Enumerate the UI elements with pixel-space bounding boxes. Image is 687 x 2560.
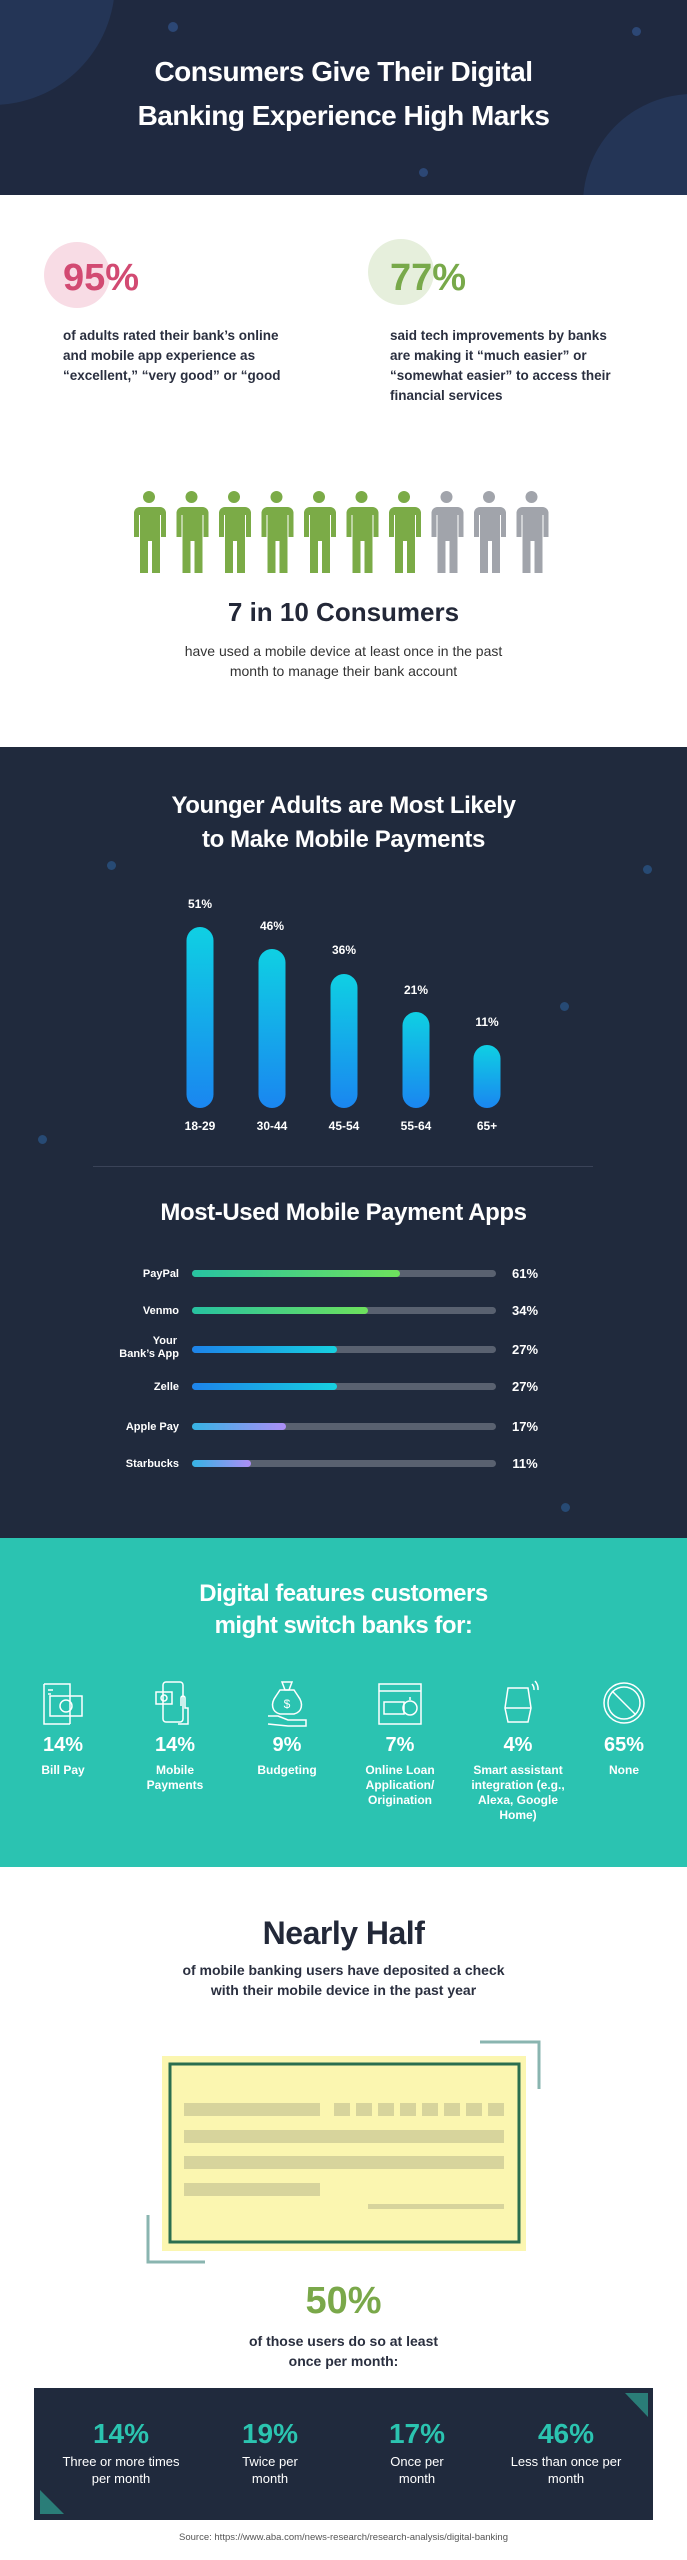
panel: mobile payments bbox=[0, 747, 687, 1538]
icon: none bbox=[604, 1683, 644, 1723]
text: 7 in 10 description bbox=[185, 643, 502, 679]
text: 7 in 10 description: have used a mobile device at least once in the past bbox=[185, 643, 502, 659]
stat: 77%: financial services bbox=[390, 388, 503, 403]
icon: smart assistant bbox=[505, 1681, 538, 1722]
heading: digital features: might switch banks for: bbox=[215, 1612, 472, 1639]
panel: digital features: Mobile Payments bbox=[147, 1763, 203, 1792]
stat: 95%: and mobile app experience as bbox=[63, 348, 255, 363]
text: 50% description bbox=[249, 2333, 438, 2369]
stat: 17%: month bbox=[399, 2471, 435, 2486]
stat: 77%: are making it “much easier” or bbox=[390, 348, 587, 363]
panel: digital features: 9% bbox=[273, 1734, 301, 1756]
panel: digital features: None bbox=[609, 1763, 639, 1777]
bar chart: payment apps: 17% bbox=[512, 1419, 538, 1434]
stat: 77%: 77% bbox=[390, 257, 466, 299]
text: nearly half description bbox=[182, 1962, 505, 1998]
bar chart: age groups: 21% bbox=[404, 983, 428, 997]
stat: 17%: 17% bbox=[389, 2418, 445, 2449]
bar chart: age groups: 51% bbox=[188, 897, 212, 911]
panel: digital features: 7% bbox=[386, 1734, 414, 1756]
stat: 77%: said tech improvements by banks bbox=[390, 328, 607, 343]
bar chart: payment apps: 11% bbox=[512, 1456, 538, 1471]
bar chart: payment apps: 27% bbox=[512, 1379, 538, 1394]
heading: digital features: Digital features customers bbox=[199, 1580, 488, 1607]
bar chart: age groups: 18-29 bbox=[185, 1119, 216, 1133]
bar chart: payment apps: Starbucks bbox=[126, 1458, 179, 1470]
panel: digital features: Smart assistant integration (e.g., Alexa, Google Home) bbox=[471, 1763, 565, 1822]
stats row bbox=[41, 1734, 85, 1777]
bar chart: payment apps: Bank’s App bbox=[119, 1348, 179, 1360]
heading: younger adults: to Make Mobile Payments bbox=[202, 826, 485, 853]
stat: 46%: Less than once per month bbox=[511, 2454, 621, 2486]
illustration: check bbox=[146, 2040, 540, 2264]
icon: bill pay bbox=[44, 1684, 82, 1724]
text: nearly half description: of mobile banking users have deposited a check bbox=[182, 1962, 505, 1978]
stat: 95%: of adults rated their bank’s online bbox=[63, 328, 279, 343]
bar chart: age groups: 36% bbox=[332, 943, 356, 957]
heading: younger adults bbox=[171, 792, 516, 853]
bar chart: age groups: 11% bbox=[475, 1015, 499, 1029]
text: 50% description: once per month: bbox=[289, 2353, 398, 2369]
stat: 77% bbox=[368, 239, 611, 403]
icon: mobile payments bbox=[156, 1682, 188, 1724]
bar chart: payment apps: 27% bbox=[512, 1342, 538, 1357]
panel: digital features: Budgeting bbox=[257, 1763, 317, 1777]
bar chart: age groups: 45-54 bbox=[329, 1119, 360, 1133]
icon: online loan bbox=[379, 1684, 421, 1724]
stats row: 14% bbox=[43, 1734, 83, 1756]
text: 50% description: of those users do so at least bbox=[249, 2333, 438, 2349]
stat: 77%: “somewhat easier” to access their bbox=[390, 368, 611, 383]
stat: 50%: 50% bbox=[305, 2280, 382, 2322]
heading: most-used apps: Most-Used Mobile Payment Apps bbox=[160, 1199, 527, 1226]
icons row bbox=[43, 1680, 645, 1727]
panel: digital features: 14% bbox=[155, 1734, 195, 1756]
panel: deposit frequency bbox=[34, 2388, 653, 2520]
heading: 7 in 10 consumers: 7 in 10 Consumers bbox=[228, 597, 459, 627]
stat: 14% bbox=[62, 2418, 180, 2486]
panel: digital features: Online Loan Application/ Origination bbox=[365, 1763, 435, 1807]
bar chart: age groups: 46% bbox=[260, 919, 284, 933]
stats row: Bill Pay bbox=[41, 1763, 85, 1777]
source: Source: https://www.aba.com/news-research/research-analysis/digital-banking bbox=[179, 2532, 508, 2543]
stat: 19%: 19% bbox=[242, 2418, 298, 2449]
bar chart: age groups: 65+ bbox=[477, 1119, 497, 1133]
stat: 46%: 46% bbox=[538, 2418, 594, 2449]
bar chart: age groups: 30-44 bbox=[257, 1119, 288, 1133]
stat: 46% bbox=[511, 2418, 622, 2486]
stat: 95%: “excellent,” “very good” or “good bbox=[63, 368, 281, 383]
bar chart: payment apps: Venmo bbox=[143, 1305, 179, 1317]
bar chart: payment apps: Apple Pay bbox=[126, 1421, 180, 1433]
text: 7 in 10 description: month to manage their bank account bbox=[230, 663, 457, 679]
panel: digital features: 4% bbox=[504, 1734, 532, 1756]
heading: nearly half: Nearly Half bbox=[263, 1915, 424, 1951]
bar chart: age groups bbox=[185, 897, 500, 1133]
stat: 17% bbox=[389, 2418, 445, 2486]
title: Consumers Give Their Digital bbox=[154, 56, 533, 87]
bar chart: payment apps: 34% bbox=[512, 1303, 538, 1318]
icon: budgeting: $ bbox=[284, 1697, 291, 1711]
text: nearly half description: with their mobile device in the past year bbox=[211, 1982, 476, 1998]
bar chart: payment apps: Your bbox=[153, 1335, 178, 1347]
bar chart: payment apps: PayPal bbox=[143, 1268, 179, 1280]
stat: 14%: 14% bbox=[93, 2418, 149, 2449]
panel: digital features: 65% bbox=[604, 1734, 644, 1756]
icon: budgeting bbox=[268, 1682, 306, 1726]
stat: 17%: Once per bbox=[390, 2454, 444, 2469]
heading: younger adults: Younger Adults are Most Likely bbox=[171, 792, 516, 819]
title bbox=[138, 56, 549, 131]
stat: 19%: month bbox=[252, 2471, 288, 2486]
panel: digital features bbox=[0, 1538, 687, 1867]
icon: 7 of 10 people bbox=[134, 491, 548, 573]
stat: 95%: 95% bbox=[63, 257, 139, 299]
bar chart: payment apps: Zelle bbox=[154, 1381, 179, 1393]
title: Banking Experience High Marks bbox=[138, 100, 549, 131]
stat: 19%: Twice per bbox=[242, 2454, 298, 2469]
bar chart: age groups: 55-64 bbox=[401, 1119, 432, 1133]
stat: 14%: Three or more times per month bbox=[62, 2454, 180, 2486]
stat: 19% bbox=[242, 2418, 298, 2486]
bar chart: payment apps bbox=[119, 1266, 538, 1471]
heading: digital features bbox=[199, 1580, 488, 1639]
header panel bbox=[0, 0, 687, 195]
bar chart: payment apps: 61% bbox=[512, 1266, 538, 1281]
stat: 95% bbox=[44, 242, 281, 383]
